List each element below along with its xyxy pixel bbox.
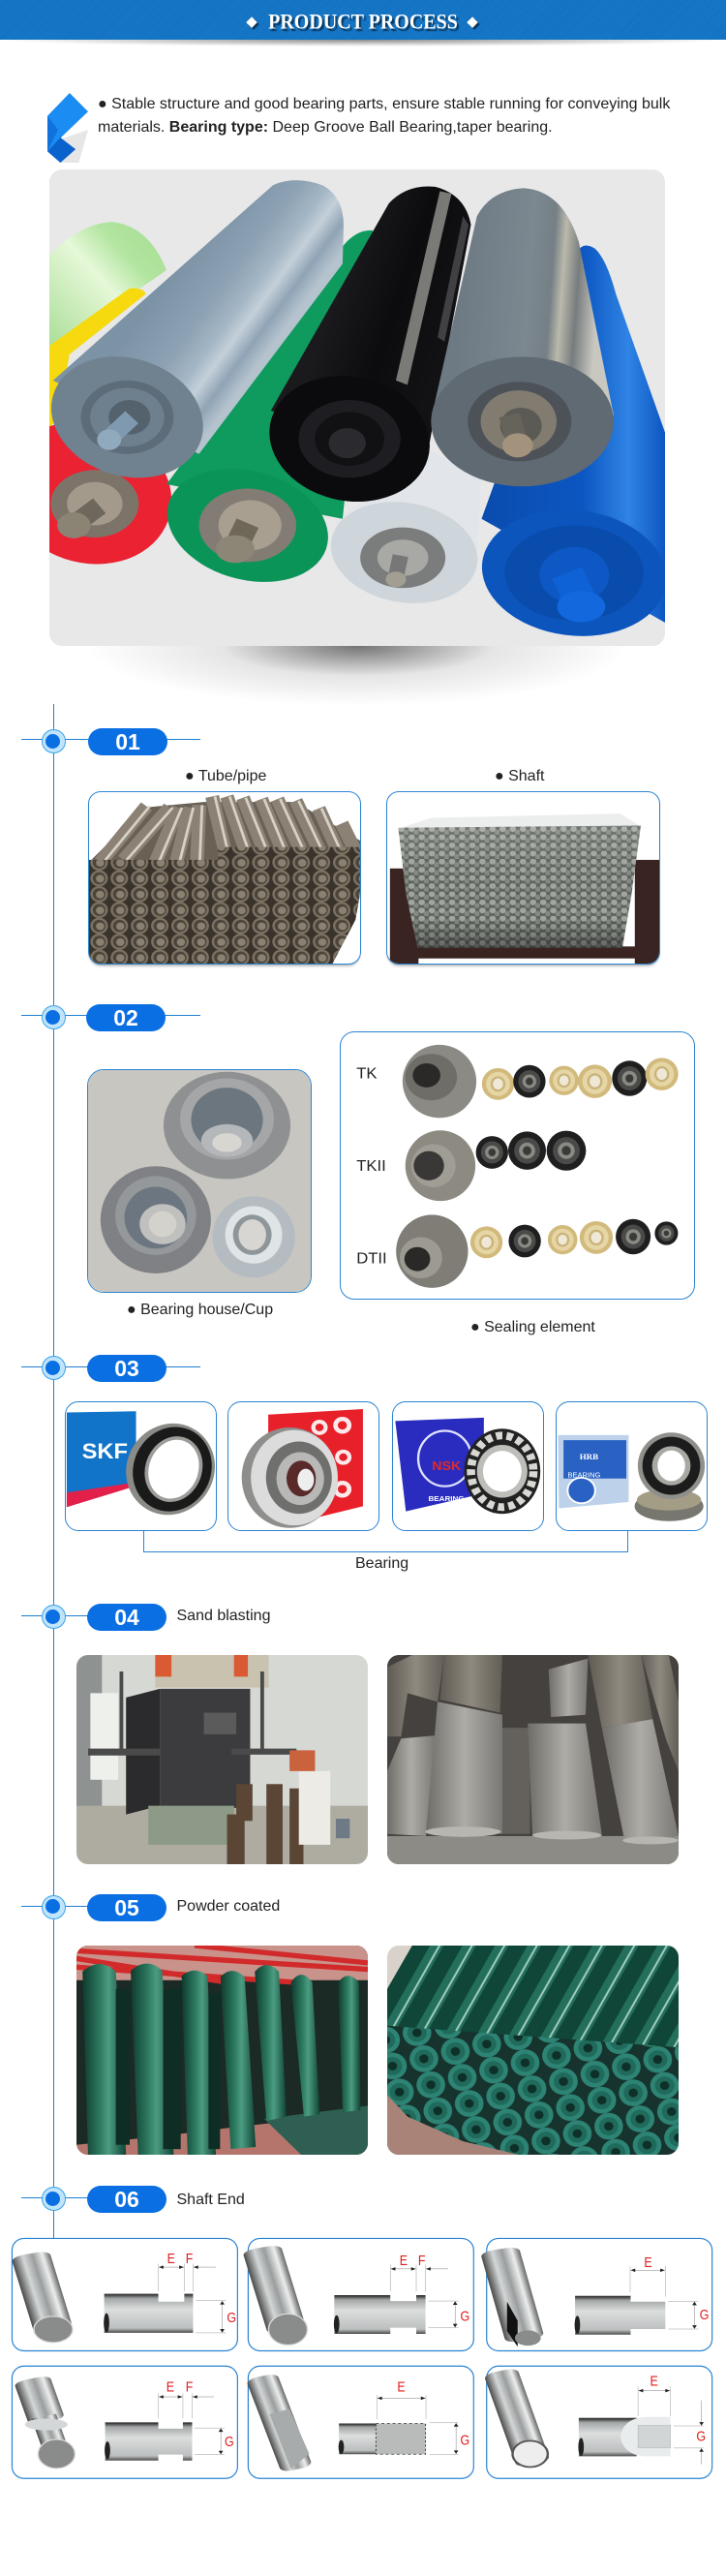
photo: tube stack — [88, 791, 361, 965]
banner bar — [0, 0, 726, 40]
intro text: ● Stable structure and good bearing parts, ensure stable running for conveying bulk — [98, 96, 670, 112]
floor — [76, 1806, 368, 1864]
badge 01 — [88, 728, 167, 755]
open door — [126, 1689, 160, 1815]
photo: green tubes hanging — [76, 1946, 368, 2155]
badge 01: 01 — [115, 729, 140, 754]
HRB box — [558, 1435, 628, 1509]
HRB box: HRB — [580, 1452, 598, 1461]
yellow roller — [49, 289, 146, 428]
panel: shaft end 4 — [12, 2366, 237, 2478]
node — [41, 1605, 66, 1629]
badge 03 — [87, 1355, 166, 1382]
section 02 header — [21, 1004, 200, 1031]
red truss — [76, 1946, 368, 1984]
photo: NSK bearing — [392, 1401, 544, 1531]
floor — [76, 2112, 368, 2155]
photo: blasted pipes — [387, 1655, 679, 1864]
badge 05 — [87, 1894, 166, 1921]
panel: shaft end 1: G — [227, 2310, 236, 2325]
section 04 header — [21, 1604, 270, 1631]
panel: shaft end 2 — [242, 2238, 473, 2351]
main photo shadow — [87, 646, 629, 706]
section 06 header — [21, 2186, 245, 2213]
node — [41, 1894, 66, 1919]
header banner — [0, 0, 726, 46]
bottom row — [387, 1836, 679, 1864]
row TKII — [356, 1130, 586, 1201]
timeline spine — [53, 704, 54, 2238]
photo: FAG bearing — [227, 1401, 379, 1531]
panel: shaft end 6: G — [696, 2429, 706, 2444]
row TKII: TKII — [356, 1158, 386, 1175]
tubes — [82, 1964, 360, 2155]
ceiling — [76, 1946, 368, 1980]
photo: HRB bearing — [556, 1401, 708, 1531]
photo: blasting booth — [76, 1655, 368, 1864]
label: sealing element: ● Sealing element — [470, 1319, 595, 1335]
badge 06 — [87, 2186, 166, 2213]
node — [41, 1005, 66, 1029]
bearing — [242, 1427, 338, 1528]
photo: green tube ends — [387, 1946, 679, 2155]
connector — [21, 1015, 200, 1016]
walls — [76, 1655, 368, 1807]
connector — [21, 1906, 89, 1907]
panel: shaft end 4: E — [166, 2378, 174, 2395]
step title: Shaft End — [176, 2192, 245, 2208]
photo: shaft stack — [386, 791, 660, 965]
SKF box: SKF — [82, 1439, 128, 1463]
badge 03: 03 — [114, 1356, 139, 1381]
connector — [21, 1366, 200, 1367]
tube ends — [387, 2026, 679, 2155]
banner shadow — [0, 40, 726, 46]
bars — [398, 826, 641, 948]
panel: shaft end 3: G — [700, 2307, 709, 2322]
main photo: coloured rollers — [49, 169, 665, 646]
booth top — [155, 1655, 269, 1688]
red roller — [0, 396, 197, 590]
control cabinet — [299, 1771, 330, 1845]
rod backing — [91, 802, 360, 864]
panel: shaft end 2: G — [460, 2308, 469, 2324]
photo: SKF bearing — [65, 1401, 217, 1531]
panel: shaft end 2: E — [400, 2253, 408, 2268]
badge 04 — [87, 1604, 166, 1631]
badge 02: 02 — [113, 1005, 138, 1030]
badge 05: 05 — [114, 1895, 139, 1920]
node — [41, 1356, 66, 1380]
row TK — [356, 1045, 679, 1118]
panel: shaft end 4: F — [186, 2378, 193, 2395]
tube bodies — [387, 1946, 679, 2058]
panel: shaft end 6 — [483, 2366, 712, 2478]
top of bars — [398, 813, 641, 829]
grey-blue roller — [32, 180, 344, 499]
tubes on rack — [227, 1784, 303, 1864]
photo: bearing house — [87, 1069, 312, 1293]
right cup — [212, 1196, 295, 1277]
step title: Sand blasting — [176, 1608, 270, 1624]
panel: shaft end 1 — [11, 2238, 237, 2351]
section 01 header — [21, 728, 200, 755]
label: shaft: ● Shaft — [495, 768, 544, 784]
HRB box: BEARING — [567, 1471, 601, 1479]
connector — [21, 1615, 89, 1616]
step title: Powder coated — [176, 1898, 280, 1915]
panel: shaft end 5: G — [460, 2432, 469, 2448]
left diamond: ◆ — [246, 14, 257, 30]
panel: shaft end 3: E — [644, 2254, 652, 2270]
panel: shaft end 2: F — [418, 2253, 426, 2268]
panel: shaft end 5: E — [397, 2378, 406, 2395]
panel: shaft end 1: E — [167, 2251, 175, 2266]
upper bearing — [638, 1432, 705, 1499]
panel: shaft end 4: G — [225, 2434, 234, 2449]
frame — [390, 860, 659, 964]
row TK: TK — [356, 1065, 378, 1082]
FAG box — [268, 1409, 363, 1517]
section 05 header — [21, 1894, 280, 1921]
back pipes — [387, 1655, 679, 1771]
black roller — [254, 186, 470, 518]
front pipes — [387, 1702, 679, 1843]
node — [41, 729, 66, 753]
upper cup — [164, 1072, 290, 1180]
connector — [21, 739, 200, 740]
connector — [21, 2196, 89, 2198]
blue roller — [473, 245, 676, 647]
lime roller — [49, 222, 166, 351]
lower bearing — [635, 1489, 704, 1521]
panel: sealing elements — [340, 1031, 695, 1300]
label: tube/pipe: ● Tube/pipe — [185, 768, 266, 784]
roller pile on floor — [264, 2105, 368, 2155]
right diamond: ◆ — [467, 14, 478, 30]
banner title: PRODUCT PROCESS — [268, 11, 458, 34]
green roller — [151, 230, 373, 600]
left cup — [101, 1166, 211, 1273]
white roller — [320, 449, 488, 616]
rack — [88, 1671, 296, 1756]
shaft end diagrams — [12, 2237, 712, 2479]
panel: shaft end 3 — [480, 2238, 712, 2351]
NSK box — [395, 1418, 484, 1512]
icon: blue ribbon — [47, 93, 88, 163]
label: bearing house: ● Bearing house/Cup — [127, 1302, 273, 1318]
row DTII — [356, 1214, 678, 1288]
row DTII: DTII — [356, 1250, 387, 1267]
panel: shaft end 5 — [246, 2366, 473, 2478]
booth interior — [160, 1689, 250, 1808]
panel: shaft end 1: F — [186, 2251, 193, 2266]
badge 02 — [86, 1004, 166, 1031]
intro text — [98, 96, 670, 136]
bracket connector — [143, 1531, 628, 1552]
NSK box: BEARING — [428, 1494, 465, 1503]
NSK box: NSK — [432, 1458, 461, 1473]
SKF box — [67, 1411, 136, 1507]
tube ends — [89, 847, 360, 964]
badge 06: 06 — [114, 2187, 139, 2212]
panel: shaft end 6: E — [650, 2374, 658, 2389]
base — [148, 1806, 234, 1845]
dark grey roller — [431, 188, 614, 486]
label: bearing: Bearing — [355, 1555, 408, 1572]
floor — [387, 2095, 519, 2155]
rods — [101, 796, 355, 862]
node — [41, 2187, 66, 2211]
section 03 header — [21, 1355, 200, 1382]
bearing — [464, 1428, 540, 1514]
intro text: materials. Bearing type: Deep Groove Ball Bearing,taper bearing. — [98, 119, 553, 136]
badge 04: 04 — [114, 1605, 139, 1630]
bearing — [115, 1414, 226, 1524]
